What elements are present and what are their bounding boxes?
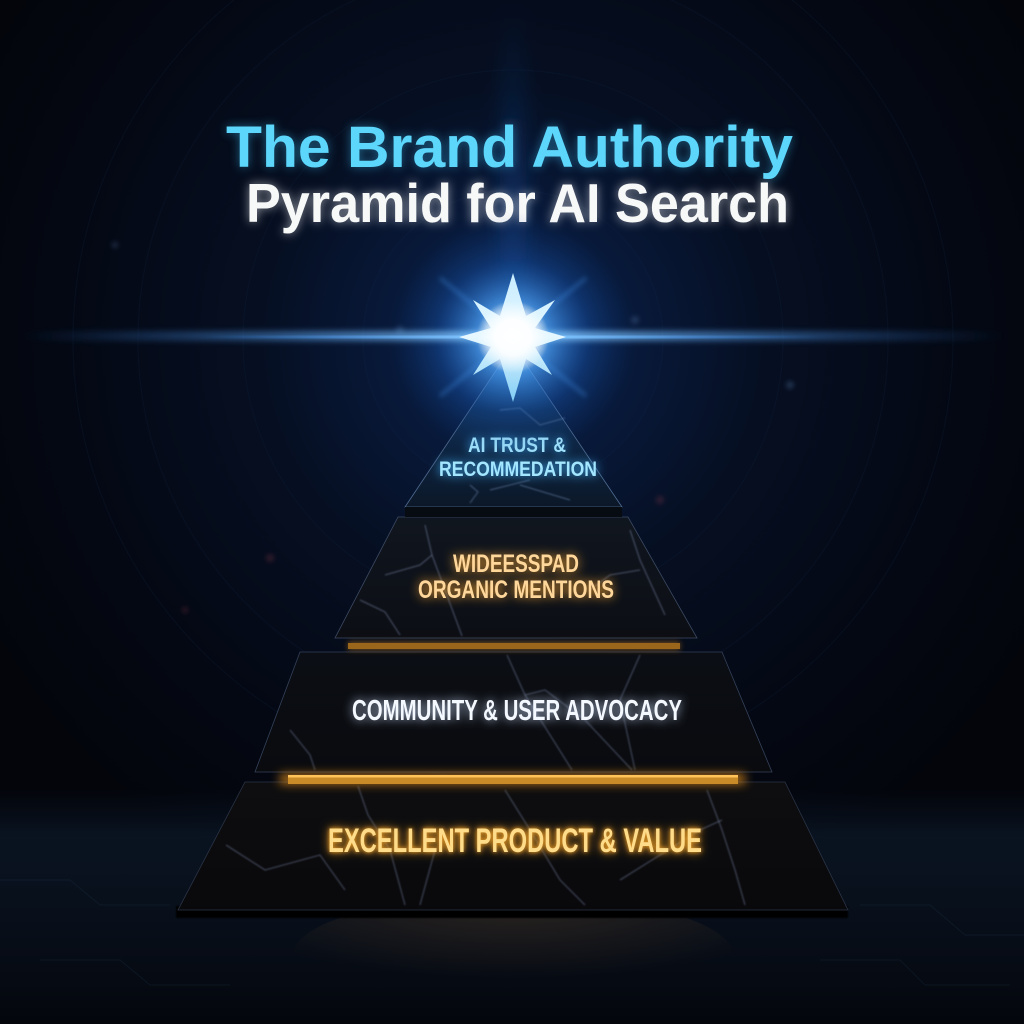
label: COMMUNITY & USER ADVOCACY bbox=[352, 695, 682, 727]
title: Pyramid for AI Search bbox=[246, 172, 789, 234]
label: EXCELLENT PRODUCT & VALUE bbox=[328, 822, 702, 860]
label: COMMUNITY & USER ADVOCACY bbox=[352, 695, 682, 727]
title bbox=[226, 115, 793, 234]
title: The Brand Authority bbox=[226, 115, 793, 180]
label: AI TRUST & bbox=[468, 434, 566, 457]
label bbox=[439, 434, 597, 481]
glowing band: lower bbox=[280, 774, 745, 784]
tier 3: community and user advocacy bbox=[255, 652, 772, 772]
pyramid bbox=[176, 345, 848, 918]
label: ORGANIC MENTIONS bbox=[418, 576, 614, 604]
label bbox=[418, 550, 614, 604]
label: AI TRUST & bbox=[468, 434, 566, 457]
label bbox=[328, 822, 702, 860]
label: RECOMMEDATION bbox=[439, 458, 597, 481]
label: RECOMMEDATION bbox=[439, 458, 597, 481]
tier 1: AI trust and recommendation bbox=[405, 345, 622, 517]
label: WIDEESSPAD bbox=[453, 550, 579, 578]
title: Pyramid for AI Search bbox=[246, 172, 789, 234]
icon: glowing star bbox=[20, 212, 1006, 462]
tier 2: widespread organic mentions bbox=[335, 517, 697, 638]
shadow under pyramid bbox=[176, 906, 848, 918]
label: EXCELLENT PRODUCT & VALUE bbox=[328, 822, 702, 860]
glowing band: upper bbox=[348, 642, 680, 650]
label: ORGANIC MENTIONS bbox=[418, 576, 614, 604]
floor reflection bbox=[293, 895, 733, 1015]
label: EXCELLENT PRODUCT & VALUE bbox=[328, 822, 702, 860]
label: WIDEESSPAD bbox=[453, 550, 579, 578]
tier 4: excellent product and value bbox=[178, 782, 848, 910]
title: The Brand Authority bbox=[226, 115, 793, 180]
